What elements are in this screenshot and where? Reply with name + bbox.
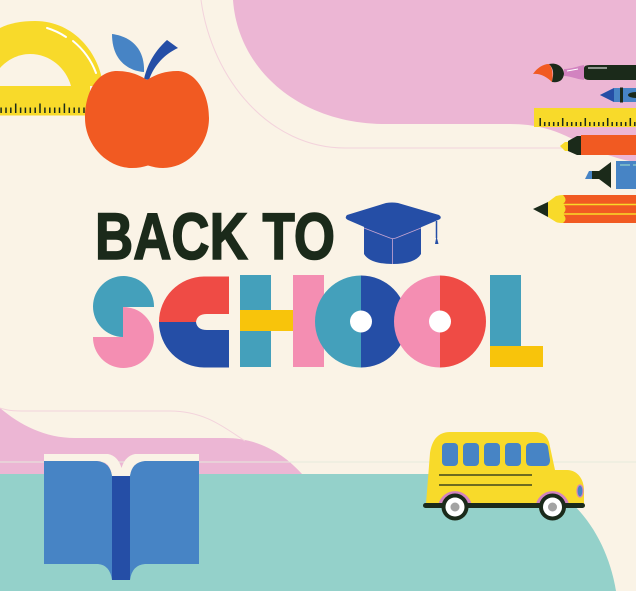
blue highlighter: [585, 161, 636, 189]
apple: [85, 34, 209, 168]
top pink blob: [233, 0, 636, 162]
top ruler: [534, 108, 636, 127]
icon: open book: [44, 454, 199, 580]
letter L: [490, 275, 543, 367]
letter O blue: [315, 276, 407, 368]
title: SCHOOL letters: [93, 275, 543, 368]
title: BACK TO: BACK TO: [95, 199, 335, 273]
letter H: [240, 275, 324, 367]
pencil: [533, 195, 636, 223]
protractor ruler: [0, 21, 103, 116]
bottom pink blob: [0, 408, 302, 474]
letter S: [93, 276, 154, 368]
icon: graduation cap: [346, 202, 441, 264]
orange marker: [560, 135, 636, 155]
crayon: [600, 88, 636, 102]
bottom teal ground: [0, 474, 616, 591]
paintbrush: [533, 64, 636, 82]
letter C: [159, 276, 229, 368]
icon: school bus: [423, 432, 585, 520]
letter O red: [394, 276, 486, 368]
